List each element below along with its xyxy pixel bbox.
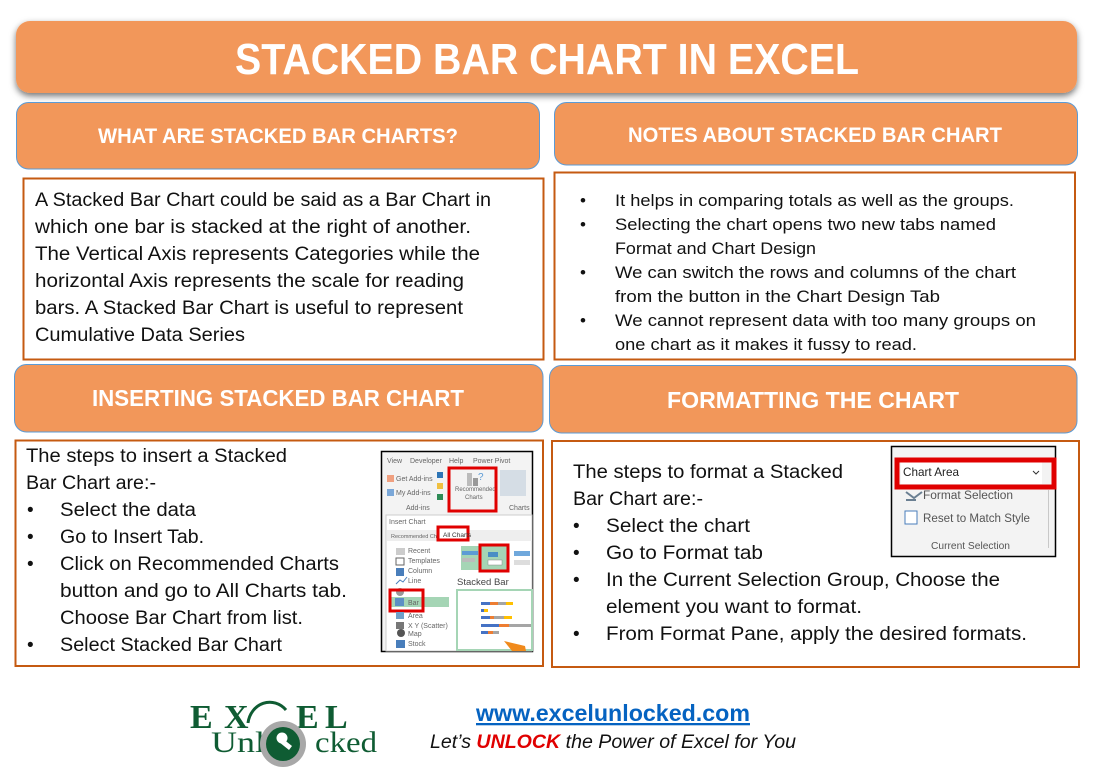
panel: notes list: We can switch the rows and columns of the chart <box>615 263 1016 282</box>
panel: formatting steps: • <box>573 543 580 564</box>
screenshot: insert chart dialog: Stacked Bar <box>457 577 509 588</box>
panel: formatting steps: The steps to format a Stacked <box>573 462 843 483</box>
logo: excel unlocked <box>190 699 377 767</box>
screenshot: insert chart dialog: All Charts <box>443 532 472 539</box>
panel: notes list: Selecting the chart opens two new tabs named <box>615 215 996 234</box>
screenshot: insert chart dialog: ? <box>478 472 484 483</box>
panel: inserting steps: • <box>27 554 34 575</box>
panel: notes list: from the button in the Chart Design Tab <box>615 287 940 306</box>
panel: inserting steps: Go to Insert Tab. <box>60 527 204 548</box>
screenshot: insert chart dialog: X Y (Scatter) <box>408 623 448 630</box>
panel: inserting steps: Select Stacked Bar Chart <box>60 635 283 656</box>
heading: formatting the chart: FORMATTING THE CHART <box>667 387 959 413</box>
screenshot: insert chart dialog: Column <box>408 568 432 575</box>
screenshot: insert chart dialog: Recommended <box>455 487 496 493</box>
heading: what are stacked bar charts <box>16 102 540 169</box>
panel: notes list: one chart as it makes it fussy to read. <box>615 335 917 354</box>
logo: excel unlocked: Unl <box>211 726 265 759</box>
screenshot: insert chart dialog: Recent <box>408 548 430 555</box>
panel: inserting steps: • <box>27 527 34 548</box>
logo: excel unlocked: X <box>224 699 249 736</box>
screenshot: insert chart dialog: Charts <box>509 505 530 512</box>
panel: formatting steps: Select the chart <box>606 516 751 537</box>
panel: formatting steps: element you want to format. <box>606 597 862 618</box>
screenshot: current selection group <box>892 446 1056 556</box>
panel: inserting steps: • <box>27 635 34 656</box>
panel: inserting steps: The steps to insert a Stacked <box>26 446 287 467</box>
screenshot: insert chart dialog: Map <box>408 631 422 638</box>
screenshot: insert chart dialog: View <box>387 458 403 465</box>
panel: inserting steps: • <box>27 500 34 521</box>
logo: excel unlocked: E <box>296 699 319 736</box>
heading: notes about stacked bar chart <box>554 102 1078 165</box>
panel: inserting steps: Select the data <box>60 500 196 521</box>
panel: inserting steps: Choose Bar Chart from list. <box>60 608 303 629</box>
screenshot: insert chart dialog: Templates <box>408 558 440 565</box>
screenshot: insert chart dialog: Insert Chart <box>389 519 426 526</box>
screenshot: insert chart dialog: Get Add-ins <box>396 476 433 483</box>
screenshot: current selection group: Current Selection <box>931 541 1010 552</box>
screenshot: insert chart dialog: Help <box>449 458 464 465</box>
screenshot: insert chart dialog: Add-ins <box>406 505 430 512</box>
screenshot: current selection group: Reset to Match Style <box>923 513 1030 525</box>
screenshot: insert chart dialog: Bar <box>408 600 420 607</box>
panel: formatting steps <box>552 441 1079 667</box>
heading: formatting the chart <box>550 366 1077 433</box>
panel: definition text: which one bar is stacked at the right of another. <box>34 217 471 238</box>
logo: excel unlocked: cked <box>315 726 377 759</box>
panel: formatting steps: • <box>573 516 580 537</box>
panel: definition text: Cumulative Data Series <box>35 325 245 346</box>
screenshot: insert chart dialog: Charts <box>465 495 483 501</box>
panel: formatting steps: In the Current Selection Group, Choose the <box>606 570 1000 591</box>
panel: formatting steps: From Format Pane, apply the desired formats. <box>606 624 1027 645</box>
screenshot: insert chart dialog: Power Pivot <box>473 458 510 465</box>
heading: inserting stacked bar chart <box>14 364 543 432</box>
panel: formatting steps: Bar Chart are:- <box>573 489 703 510</box>
website link: www.excelunlocked.com <box>475 700 750 726</box>
panel: formatting steps: • <box>573 624 580 645</box>
logo: excel unlocked: L <box>325 699 348 736</box>
screenshot: insert chart dialog <box>382 452 532 652</box>
title banner: STACKED BAR CHART IN EXCEL <box>235 35 859 84</box>
panel: definition text: bars. A Stacked Bar Chart is useful to represent <box>35 298 464 319</box>
panel: definition text: horizontal Axis represents the scale for reading <box>35 271 464 292</box>
screenshot: insert chart dialog: My Add-ins <box>396 490 431 497</box>
screenshot: current selection group: Format Selection <box>923 490 1013 502</box>
heading: inserting stacked bar chart: INSERTING STACKED BAR CHART <box>92 385 464 411</box>
screenshot: insert chart dialog: Stock <box>408 641 426 648</box>
panel: notes list: We cannot represent data with too many groups on <box>615 311 1036 330</box>
logo: excel unlocked: E <box>190 699 213 736</box>
panel: inserting steps <box>16 440 543 666</box>
panel: formatting steps: Go to Format tab <box>606 543 763 564</box>
heading: what are stacked bar charts: WHAT ARE STACKED BAR CHARTS? <box>98 125 458 148</box>
heading: notes about stacked bar chart: NOTES ABOUT STACKED BAR CHART <box>628 124 1002 147</box>
screenshot: current selection group: Chart Area <box>903 465 959 479</box>
tagline: Let’s UNLOCK the Power of Excel for You <box>430 731 796 753</box>
screenshot: insert chart dialog: Developer <box>410 458 443 465</box>
panel: notes list: • <box>580 191 586 210</box>
screenshot: insert chart dialog: Area <box>408 613 423 620</box>
panel: inserting steps: Bar Chart are:- <box>26 473 156 494</box>
panel: formatting steps: • <box>573 570 580 591</box>
panel: definition text: The Vertical Axis represents Categories while the <box>35 244 480 265</box>
panel: definition text: A Stacked Bar Chart could be said as a Bar Chart in <box>35 190 491 211</box>
panel: notes list: • <box>580 215 586 234</box>
panel: inserting steps: Click on Recommended Charts <box>60 554 339 575</box>
panel: inserting steps: button and go to All Charts tab. <box>60 581 347 602</box>
panel: notes list <box>554 172 1075 360</box>
screenshot: insert chart dialog: Recommended Charts <box>391 534 446 540</box>
title banner <box>16 21 1077 93</box>
panel: notes list: It helps in comparing totals as well as the groups. <box>615 191 1014 210</box>
panel: notes list: • <box>580 263 586 282</box>
panel: definition text <box>24 178 544 360</box>
panel: notes list: Format and Chart Design <box>615 239 816 258</box>
panel: notes list: • <box>580 311 586 330</box>
screenshot: insert chart dialog: Line <box>408 578 421 585</box>
